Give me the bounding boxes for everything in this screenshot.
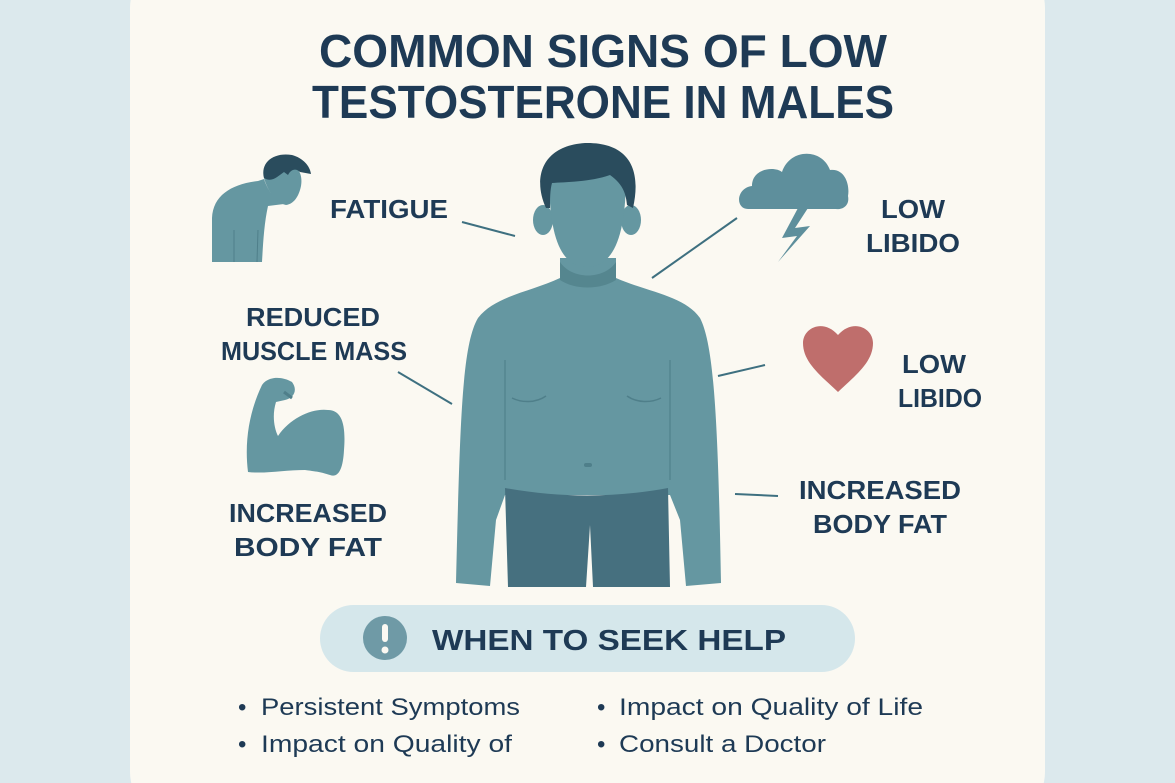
title: COMMON SIGNS OF LOW <box>319 25 888 77</box>
panel: when to seek help <box>320 605 855 672</box>
labels: REDUCED <box>246 302 380 332</box>
icon: exclamation <box>363 616 407 660</box>
list: help items <box>238 694 923 758</box>
list: help items: Persistent Symptoms <box>261 694 520 721</box>
list: help items: • <box>238 731 246 758</box>
icon: tired man <box>212 154 311 262</box>
list: help items: Impact on Quality of Life <box>619 694 923 721</box>
panel: when to seek help: WHEN TO SEEK HELP <box>432 625 786 657</box>
list: help items: • <box>238 694 246 721</box>
icon: cloud with lightning <box>739 154 848 262</box>
list: help items: Consult a Doctor <box>619 731 826 758</box>
labels: LOW <box>902 349 966 379</box>
labels: LIBIDO <box>866 228 960 258</box>
title: TESTOSTERONE IN MALES <box>312 76 894 128</box>
labels: MUSCLE MASS <box>221 336 407 366</box>
labels <box>221 194 982 562</box>
list: help items: • <box>597 694 605 721</box>
labels: BODY FAT <box>234 532 382 562</box>
labels: INCREASED <box>229 498 387 528</box>
title <box>312 25 894 128</box>
labels: LOW <box>881 194 945 224</box>
figure: body <box>456 143 721 587</box>
list: help items: • <box>597 731 605 758</box>
icon: flexed arm <box>247 378 344 476</box>
connectors <box>398 218 778 496</box>
labels: FATIGUE <box>330 194 448 224</box>
panel: card <box>130 0 1045 783</box>
icon: heart <box>803 326 873 392</box>
labels: INCREASED <box>799 475 961 505</box>
labels: BODY FAT <box>813 509 947 539</box>
labels: LIBIDO <box>898 383 982 413</box>
list: help items: Impact on Quality of <box>261 731 512 758</box>
